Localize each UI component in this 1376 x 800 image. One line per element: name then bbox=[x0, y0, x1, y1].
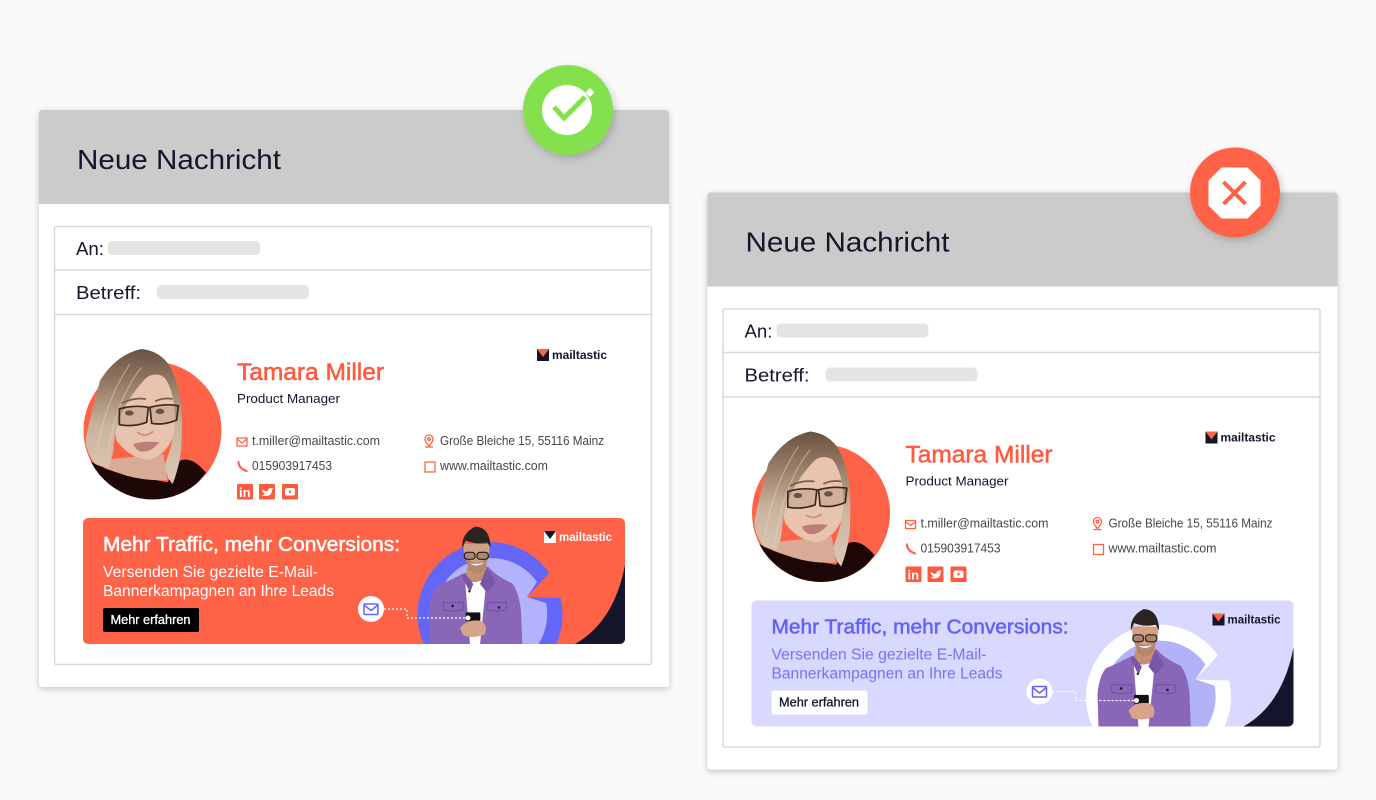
card header: Neue Nachricht bbox=[77, 144, 281, 175]
dark corner bbox=[575, 565, 625, 644]
banner button bbox=[103, 608, 199, 632]
name and job title: Product Manager bbox=[237, 391, 341, 406]
social icons: in bbox=[908, 568, 919, 582]
banner logo bbox=[1212, 614, 1280, 626]
recipient field: An: bbox=[744, 322, 772, 342]
banner logo: mailtastic bbox=[559, 530, 612, 544]
icon: website bbox=[425, 462, 435, 472]
connector line bbox=[1052, 692, 1136, 700]
address: Große Bleiche 15, 55116 Mainz bbox=[440, 434, 604, 448]
mailtastic logo: mailtastic bbox=[552, 348, 607, 362]
subject field bbox=[76, 283, 309, 303]
phone number: 015903917453 bbox=[252, 459, 332, 473]
recipient field: An: bbox=[76, 239, 104, 259]
address: Große Bleiche 15, 55116 Mainz bbox=[1108, 516, 1272, 530]
message form frame bbox=[722, 309, 1320, 747]
banner body text bbox=[772, 646, 1003, 682]
ring graphic bbox=[1086, 624, 1231, 726]
panel: incorrect email bbox=[708, 148, 1338, 770]
card header: Neue Nachricht bbox=[746, 226, 950, 258]
portrait photo bbox=[752, 431, 890, 586]
card header bbox=[708, 192, 1338, 286]
badge: cross bbox=[1190, 148, 1280, 238]
contact details bbox=[906, 516, 1272, 556]
banner logo: mailtastic bbox=[1228, 612, 1281, 626]
subject field: Betreff: bbox=[76, 283, 141, 303]
connector line bbox=[384, 609, 468, 618]
icon: location bbox=[1094, 518, 1102, 530]
card background bbox=[708, 192, 1338, 770]
phone number: 015903917453 bbox=[920, 542, 1001, 556]
subject field: Betreff: bbox=[744, 366, 810, 386]
contact details bbox=[237, 434, 604, 473]
banner body text: Bannerkampagnen an Ihre Leads bbox=[103, 583, 334, 600]
card background bbox=[39, 110, 669, 687]
name and job title: Product Manager bbox=[906, 474, 1009, 488]
icon: phone bbox=[907, 544, 915, 554]
banner button: Mehr erfahren bbox=[110, 613, 191, 627]
subject field bbox=[744, 366, 978, 386]
banner button bbox=[772, 690, 868, 714]
dark corner bbox=[1244, 648, 1294, 726]
icon: phone bbox=[238, 462, 246, 471]
name and job title bbox=[906, 442, 1052, 488]
banner body text bbox=[103, 564, 334, 600]
recipient field bbox=[76, 239, 260, 259]
banner heading: Mehr Traffic, mehr Conversions: bbox=[772, 616, 1068, 638]
icon: location bbox=[425, 435, 433, 447]
recipient field bbox=[744, 322, 928, 342]
icon: envelope bbox=[1026, 678, 1052, 704]
badge: check mark bbox=[523, 65, 613, 155]
icon: email bbox=[237, 438, 247, 446]
message form frame bbox=[54, 226, 652, 664]
icon: email bbox=[906, 520, 916, 528]
icon: envelope bbox=[358, 596, 384, 622]
website: www.mailtastic.com bbox=[439, 459, 548, 473]
icon: person with phone bbox=[429, 527, 522, 645]
banner body text: Versenden Sie gezielte E-Mail- bbox=[103, 564, 318, 581]
banner body text: Versenden Sie gezielte E-Mail- bbox=[772, 646, 986, 664]
banner body text: Bannerkampagnen an Ihre Leads bbox=[772, 666, 1003, 682]
icon: person with phone bbox=[1098, 609, 1191, 727]
email address: t.miller@mailtastic.com bbox=[252, 434, 380, 448]
name and job title: Tamara Miller bbox=[906, 442, 1052, 468]
panel: correct email bbox=[39, 65, 669, 687]
banner: lavender bbox=[752, 600, 1294, 726]
social icons: in bbox=[239, 485, 251, 500]
email address: t.miller@mailtastic.com bbox=[920, 516, 1048, 530]
name and job title bbox=[237, 359, 384, 406]
ring graphic bbox=[418, 542, 562, 644]
banner logo bbox=[544, 531, 612, 543]
icon: website bbox=[1094, 544, 1104, 554]
mailtastic logo: mailtastic bbox=[1220, 430, 1276, 444]
social icons bbox=[906, 566, 966, 582]
portrait photo bbox=[83, 349, 221, 504]
social icons bbox=[237, 484, 298, 500]
banner heading: Mehr Traffic, mehr Conversions: bbox=[103, 534, 400, 556]
website: www.mailtastic.com bbox=[1108, 542, 1216, 556]
card header bbox=[39, 110, 669, 204]
banner: orange bbox=[83, 518, 625, 644]
name and job title: Tamara Miller bbox=[237, 359, 384, 386]
banner button: Mehr erfahren bbox=[779, 696, 859, 710]
